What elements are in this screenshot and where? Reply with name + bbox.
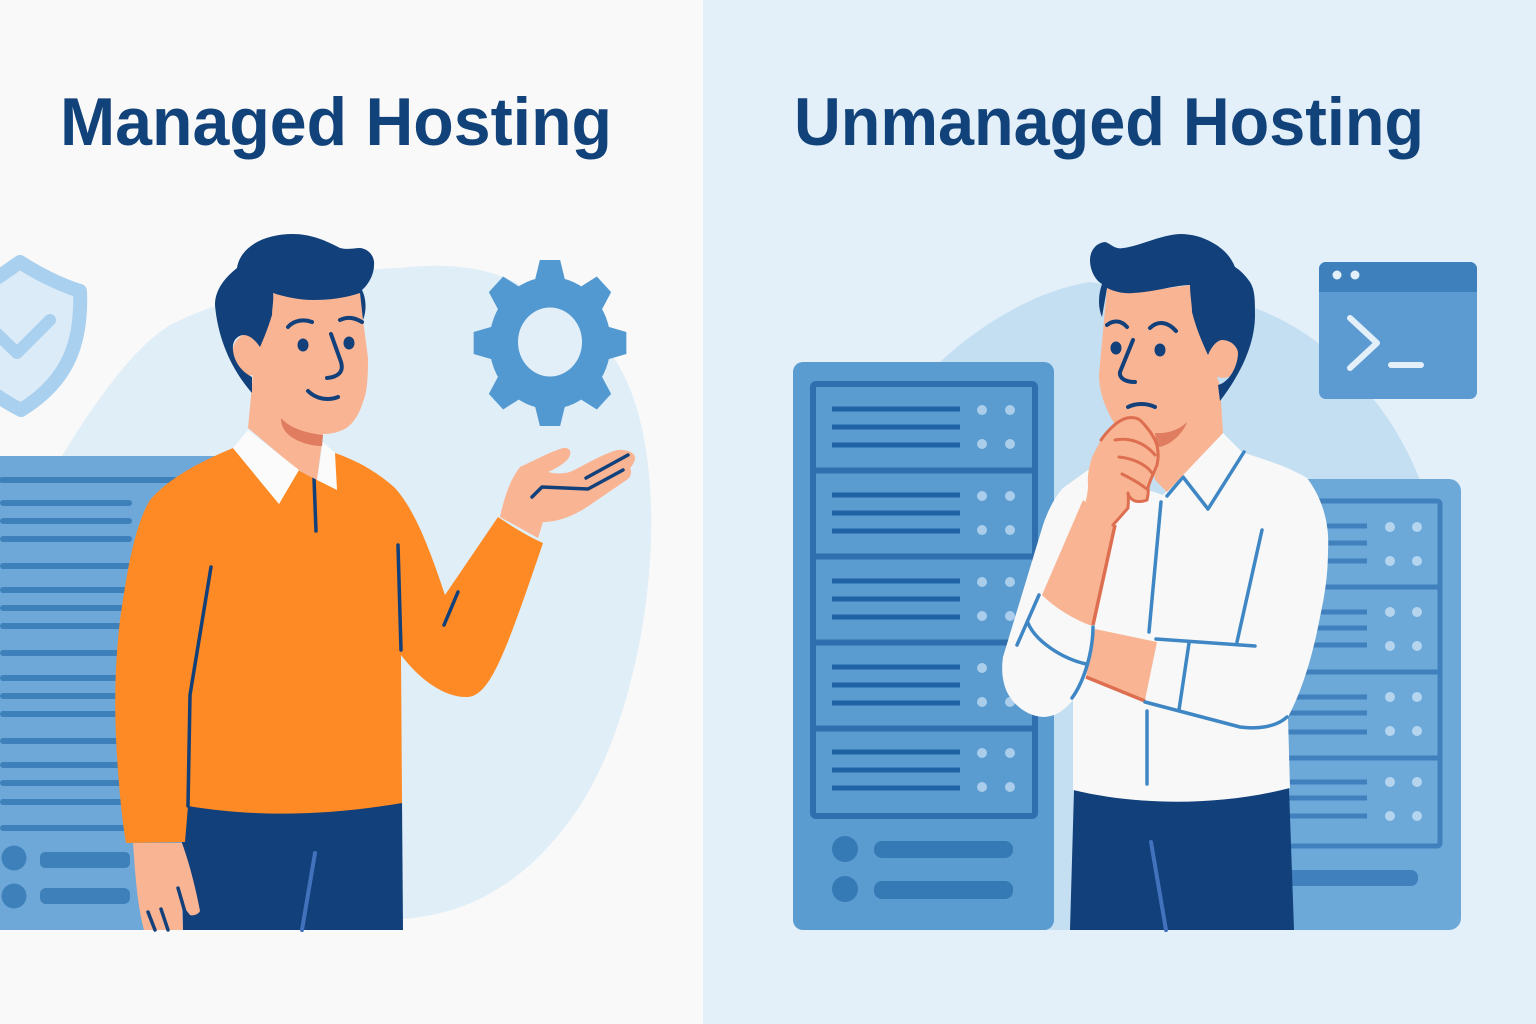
background blob left	[62, 266, 651, 919]
server rack left	[0, 456, 220, 930]
person: managed hosting user	[115, 234, 635, 930]
trousers	[182, 800, 403, 930]
icon: shield	[0, 262, 80, 410]
icon: terminal window	[1319, 262, 1477, 399]
neck and head	[248, 293, 368, 480]
trousers	[1070, 788, 1294, 930]
server rack front	[793, 362, 1054, 930]
icon: gear	[474, 260, 626, 426]
forearm upper	[1042, 500, 1115, 626]
hand on chin	[1080, 418, 1158, 525]
sweater lines	[188, 478, 458, 806]
hair	[1090, 234, 1255, 401]
face	[1107, 321, 1176, 331]
left hand	[133, 843, 200, 930]
face	[288, 318, 362, 327]
forearm lower	[1086, 629, 1157, 700]
sweater	[115, 448, 543, 843]
heading: unmanaged hosting: Unmanaged Hosting	[794, 84, 1424, 160]
open hand	[500, 448, 635, 538]
shirt lines	[1017, 452, 1287, 784]
neck and head	[1099, 285, 1223, 492]
collar	[233, 430, 337, 504]
panel: managed hosting	[0, 0, 703, 1024]
background blob right	[940, 282, 1420, 930]
server rack back	[1250, 479, 1461, 930]
panel: unmanaged hosting	[703, 0, 1536, 1024]
person: unmanaged hosting user	[1002, 234, 1328, 930]
hair	[215, 234, 374, 393]
shirt	[1002, 433, 1328, 802]
heading: managed hosting: Managed Hosting	[60, 84, 612, 160]
